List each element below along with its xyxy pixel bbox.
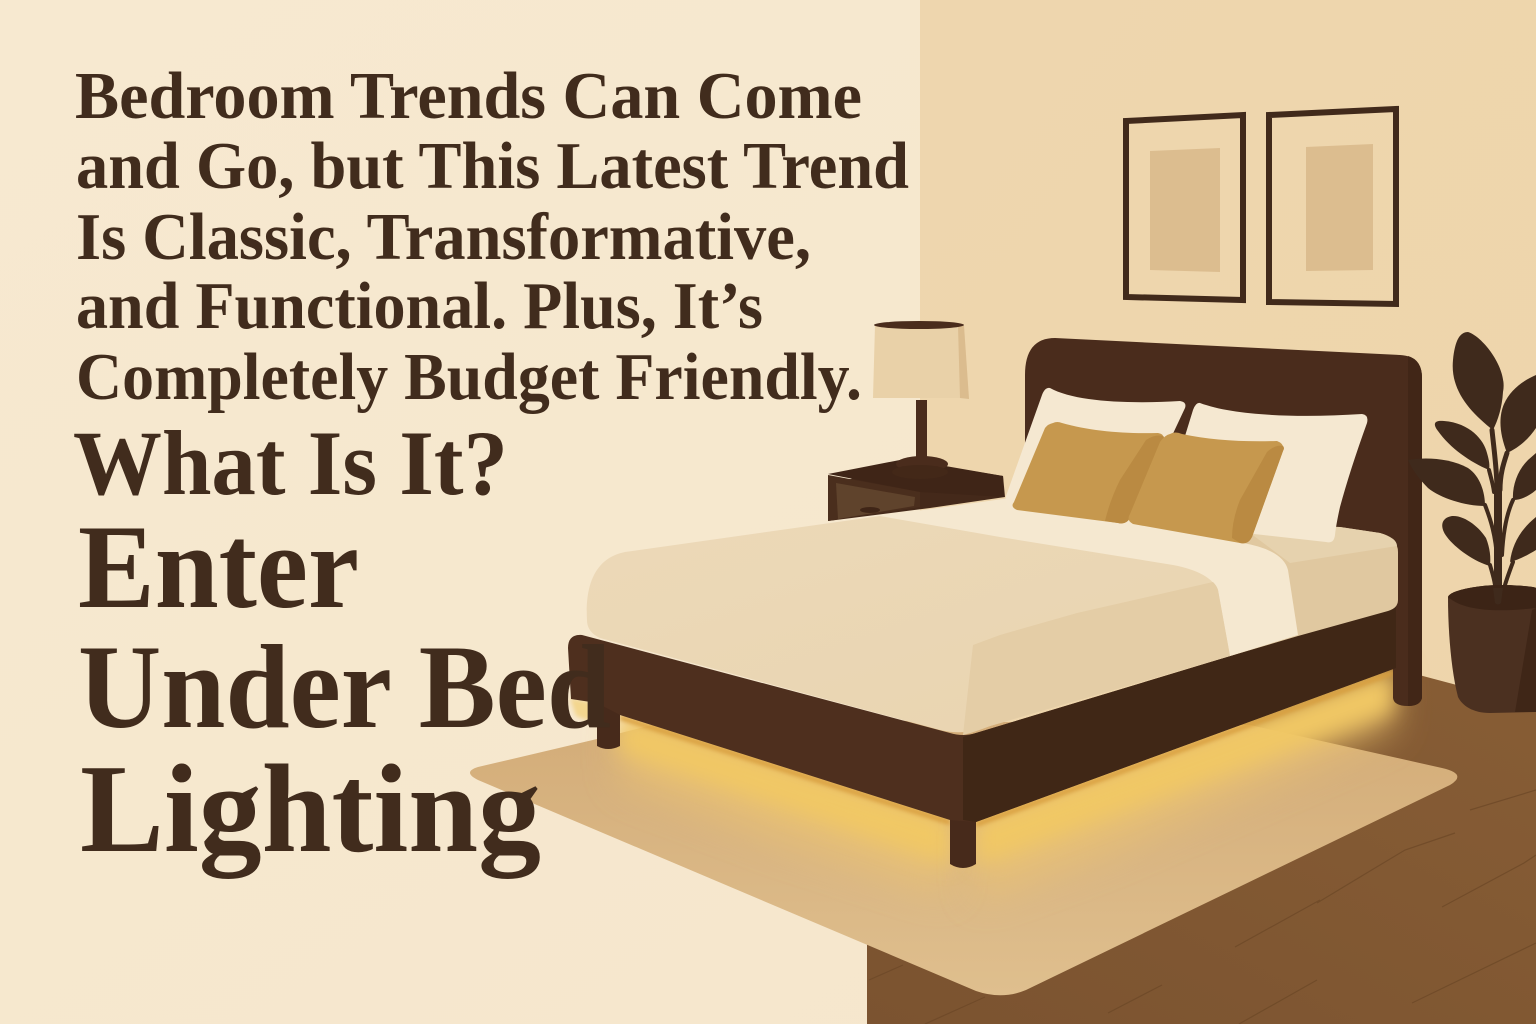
question heading: What Is It? xyxy=(73,412,508,514)
text line 1: Bedroom Trends Can Come xyxy=(75,59,862,133)
main title xyxy=(78,500,611,879)
text line 3: Is Classic, Transformative, xyxy=(76,200,811,274)
headboard right post xyxy=(1408,356,1422,706)
nightstand xyxy=(828,459,1005,521)
gold pillow left xyxy=(1013,422,1163,523)
floor plank lines xyxy=(869,790,1536,1024)
title line: Lighting: Lighting xyxy=(80,740,541,879)
glow: right side xyxy=(976,668,1393,900)
headline xyxy=(75,59,909,414)
gold pillow left shade xyxy=(1105,436,1164,523)
picture frames xyxy=(1126,109,1396,304)
blanket side fold xyxy=(963,582,1230,735)
left picture frame xyxy=(1126,115,1243,300)
house plant xyxy=(1408,332,1536,713)
text line 4: and Functional. Plus, It’s xyxy=(76,269,763,343)
bed legs xyxy=(597,695,976,868)
right picture frame xyxy=(1269,109,1396,304)
headboard xyxy=(1025,338,1422,706)
plant stems xyxy=(1485,430,1513,595)
bed blanket xyxy=(587,516,1230,735)
white pillow left xyxy=(1006,388,1185,530)
under bed light glow xyxy=(570,668,1393,900)
plant leaves xyxy=(1408,332,1536,566)
bed pillows xyxy=(1006,388,1367,543)
bedroom wall xyxy=(920,0,1536,760)
text line 2: and Go, but This Latest Trend xyxy=(76,129,909,203)
gold pillow right xyxy=(1129,432,1283,543)
glow: under end of frame xyxy=(570,698,597,724)
mattress xyxy=(1200,520,1398,656)
white sheet xyxy=(880,498,1298,656)
area rug xyxy=(470,718,1457,995)
glow: left side xyxy=(620,712,950,895)
wooden floor xyxy=(867,666,1536,1024)
leg: back left xyxy=(597,695,620,749)
bed frame xyxy=(568,606,1396,822)
plant pot xyxy=(1448,585,1536,713)
title line: Under Bed: Under Bed xyxy=(78,620,611,753)
leg: front corner xyxy=(950,800,976,868)
table lamp xyxy=(873,321,969,479)
title line: Enter: Enter xyxy=(78,500,359,633)
gold pillow right shade xyxy=(1232,446,1284,543)
white pillow right xyxy=(1185,403,1367,542)
text line 5: Completely Budget Friendly. xyxy=(76,340,862,414)
